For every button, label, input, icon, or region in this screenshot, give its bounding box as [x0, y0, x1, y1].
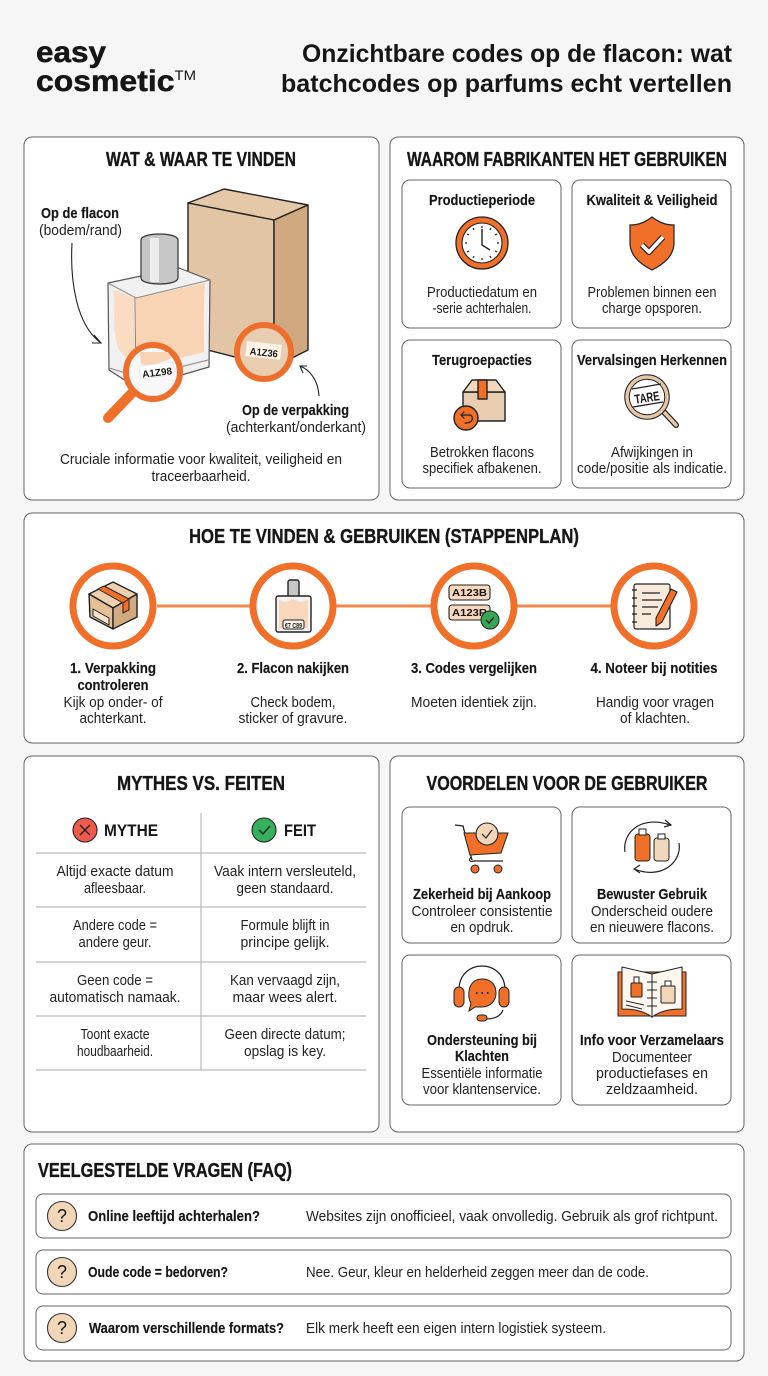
text: step 1 — [64, 660, 163, 727]
text: step 2: sticker of gravure. — [238, 710, 348, 727]
row 4: Geen directe datum; — [224, 1026, 346, 1043]
column head: feit: FEIT — [284, 821, 317, 840]
faq row 2: ? — [57, 1262, 67, 1282]
faq row 3: Elk merk heeft een eigen intern logistiek systeem. — [306, 1320, 606, 1337]
icon: open book — [618, 967, 686, 1017]
column head: mythe: MYTHE — [104, 821, 158, 840]
row 2: principe gelijk. — [240, 934, 330, 951]
table: column and row lines — [36, 813, 366, 1070]
card: kwaliteit en veiligheid — [572, 180, 731, 328]
card: vervalsingen herkennen — [572, 340, 731, 488]
faq row 1: Websites zijn onofficieel, vaak onvolledig. Gebruik als grof richtpunt. — [306, 1208, 718, 1225]
arrow: op de verpakking — [300, 366, 319, 396]
arrow: op de flacon — [72, 243, 101, 343]
icon: fake magnifier: TARE — [634, 388, 661, 407]
column head: mythe — [73, 818, 158, 842]
heading: mythes vs feiten: MYTHES VS. FEITEN — [117, 773, 285, 795]
card: ondersteuning: Klachten — [455, 1048, 509, 1065]
faq row 2 — [36, 1250, 731, 1294]
card: bewuster gebruik: Bewuster Gebruik — [597, 886, 708, 903]
card: kwaliteit en veiligheid: Kwaliteit & Veiligheid — [586, 192, 718, 209]
text: step 4: of klachten. — [620, 710, 690, 727]
row 4: houdbaarheid. — [77, 1043, 153, 1060]
step 4 — [590, 566, 718, 727]
text: step 1: Kijk op onder- of — [64, 694, 163, 711]
row 2 — [73, 917, 330, 951]
text: cruciale informatie: Cruciale informatie voor kwaliteit, veiligheid en — [60, 451, 342, 468]
row 2: Formule blijft in — [240, 917, 330, 934]
panel: mythes vs feiten — [24, 756, 379, 1132]
row 3: automatisch namaak. — [50, 989, 180, 1006]
step 3 — [411, 566, 537, 711]
card: productieperiode — [402, 180, 561, 328]
row 3 — [50, 972, 340, 1006]
faq row 2: Oude code = bedorven? — [88, 1264, 228, 1281]
icon: notebook — [614, 566, 694, 646]
illustration: perfume bottle — [108, 234, 210, 388]
card: info voor verzamelaars: Info voor Verzamelaars — [580, 1032, 724, 1049]
row 3: maar wees alert. — [232, 989, 338, 1006]
card: ondersteuning: Essentiële informatie — [422, 1065, 542, 1082]
step 2 — [237, 566, 349, 727]
label: op de flacon — [39, 205, 122, 239]
card: vervalsingen herkennen: code/positie als indicatie. — [577, 460, 727, 477]
logo: cosmetic — [36, 65, 166, 98]
heading: stappenplan: HOE TE VINDEN & GEBRUIKEN (STAPPENPLAN) — [189, 526, 579, 548]
logo — [36, 36, 196, 98]
card: kwaliteit en veiligheid: charge opsporen. — [602, 300, 702, 317]
faq row 3: ? — [57, 1318, 67, 1338]
text: step 2: Check bodem, — [250, 694, 336, 711]
faq row 1: Online leeftijd achterhalen? — [88, 1208, 260, 1225]
card: info voor verzamelaars: productiefases en — [596, 1065, 708, 1082]
card: info voor verzamelaars — [572, 955, 731, 1105]
column head: feit — [252, 818, 317, 842]
icon: parcel — [73, 566, 153, 646]
card: ondersteuning — [402, 955, 561, 1105]
faq row 1 — [36, 1194, 731, 1238]
title: Onzichtbare codes op de flacon: wat — [302, 40, 733, 68]
connector line — [157, 604, 611, 608]
panel: voordelen — [390, 756, 744, 1132]
card: info voor verzamelaars: zeldzaamheid. — [606, 1081, 698, 1098]
card: productieperiode: Productiedatum en — [427, 284, 537, 301]
card: productieperiode: -serie achterhalen. — [432, 300, 532, 317]
icon: fake magnifier — [627, 377, 676, 425]
magnifier: bottle code — [108, 345, 180, 418]
card: terugroepacties — [402, 340, 561, 488]
text: step 1: achterkant. — [80, 710, 146, 727]
label: op de verpakking: (achterkant/onderkant) — [226, 419, 366, 436]
row 1: Vaak intern versleuteld, — [214, 863, 356, 880]
card: terugroepacties: specifiek afbakenen. — [422, 460, 542, 477]
row 4: opslag is key. — [244, 1043, 326, 1060]
icon: compare codes: A123B — [452, 587, 487, 599]
card: productieperiode: Productieperiode — [429, 192, 535, 209]
row 3: Geen code = — [77, 972, 153, 989]
card: zekerheid — [402, 807, 561, 943]
label: op de flacon: (bodem/rand) — [39, 222, 122, 239]
row 1: Altijd exacte datum — [56, 863, 174, 880]
card: bewuster gebruik: en nieuwere flacons. — [590, 919, 714, 936]
card: vervalsingen herkennen: Afwijkingen in — [611, 444, 693, 461]
text: step 3 — [411, 660, 537, 711]
title — [281, 40, 733, 98]
magnifier: bottle code: A1Z98 — [142, 366, 173, 381]
card: ondersteuning: voor klantenservice. — [423, 1081, 541, 1098]
text: step 3: 3. Codes vergelijken — [411, 660, 537, 677]
card: zekerheid: Zekerheid bij Aankoop — [413, 886, 551, 903]
step 1 — [64, 566, 163, 727]
faq row 2: Nee. Geur, kleur en helderheid zeggen meer dan de code. — [306, 1264, 649, 1281]
row 2: andere geur. — [78, 934, 152, 951]
card: kwaliteit en veiligheid: Problemen binnen een — [588, 284, 716, 301]
card: terugroepacties: Terugroepacties — [432, 352, 532, 369]
card: terugroepacties: Betrokken flacons — [430, 444, 534, 461]
card: vervalsingen herkennen: Vervalsingen Herkennen — [577, 352, 727, 369]
text: step 2: 2. Flacon nakijken — [237, 660, 349, 677]
icon: return box — [454, 380, 505, 430]
icon: headset — [454, 966, 509, 1021]
icon: compare codes: A123R — [452, 607, 487, 619]
label: op de verpakking — [226, 402, 366, 436]
row 1: geen standaard. — [236, 880, 334, 897]
icon: clock — [456, 217, 508, 269]
magnifier: box code: A1Z36 — [249, 347, 279, 360]
panel: waarom fabrikanten — [390, 137, 744, 500]
logo: easy — [36, 36, 106, 69]
card: info voor verzamelaars: Documenteer — [612, 1049, 692, 1066]
row 1: afleesbaar. — [84, 880, 146, 897]
row 4: Toont exacte — [80, 1026, 150, 1043]
text: step 1: controleren — [78, 677, 148, 694]
icon: compare codes — [434, 566, 514, 646]
title: batchcodes op parfums echt vertellen — [281, 70, 732, 98]
row 3: Kan vervaagd zijn, — [230, 972, 340, 989]
card: zekerheid: Controleer consistentie — [412, 903, 552, 920]
heading: voordelen: VOORDELEN VOOR DE GEBRUIKER — [426, 773, 708, 795]
text: step 4: Handig voor vragen — [596, 694, 714, 711]
card: ondersteuning: Ondersteuning bij — [427, 1032, 537, 1049]
row 1 — [56, 863, 356, 897]
faq row 3: Waarom verschillende formats? — [89, 1320, 284, 1337]
faq row 1: ? — [57, 1206, 67, 1226]
card: zekerheid: en opdruk. — [450, 919, 514, 936]
text: cruciale informatie: traceerbaarheid. — [152, 468, 250, 485]
text: cruciale informatie — [60, 451, 342, 485]
text: step 3: Moeten identiek zijn. — [411, 694, 537, 711]
panel: wat en waar te vinden — [24, 137, 379, 500]
icon: cart — [455, 823, 508, 873]
icon: cycle bottles — [625, 820, 679, 873]
logo: TM — [174, 67, 196, 83]
icon: shield — [630, 217, 674, 270]
row 4 — [77, 1026, 346, 1060]
heading: faq: VEELGESTELDE VRAGEN (FAQ) — [38, 1160, 292, 1182]
label: op de verpakking: Op de verpakking — [242, 402, 349, 419]
panel: faq — [24, 1144, 744, 1361]
card: bewuster gebruik: Onderscheid oudere — [591, 903, 713, 920]
panel: stappenplan — [24, 513, 744, 743]
card: bewuster gebruik — [572, 807, 731, 943]
label: op de flacon: Op de flacon — [41, 205, 119, 222]
magnifier: box code — [237, 325, 291, 379]
icon: bottle: €7 C89 — [285, 623, 302, 630]
text: step 4 — [590, 660, 718, 727]
text: step 2 — [237, 660, 349, 727]
illustration: perfume box — [188, 189, 308, 367]
faq row 3 — [36, 1306, 731, 1350]
text: step 1: 1. Verpakking — [70, 660, 156, 677]
row 2: Andere code = — [73, 917, 157, 934]
heading: wat en waar: WAT & WAAR TE VINDEN — [106, 149, 296, 171]
icon: bottle — [253, 566, 333, 646]
text: step 4: 4. Noteer bij notities — [590, 660, 718, 677]
